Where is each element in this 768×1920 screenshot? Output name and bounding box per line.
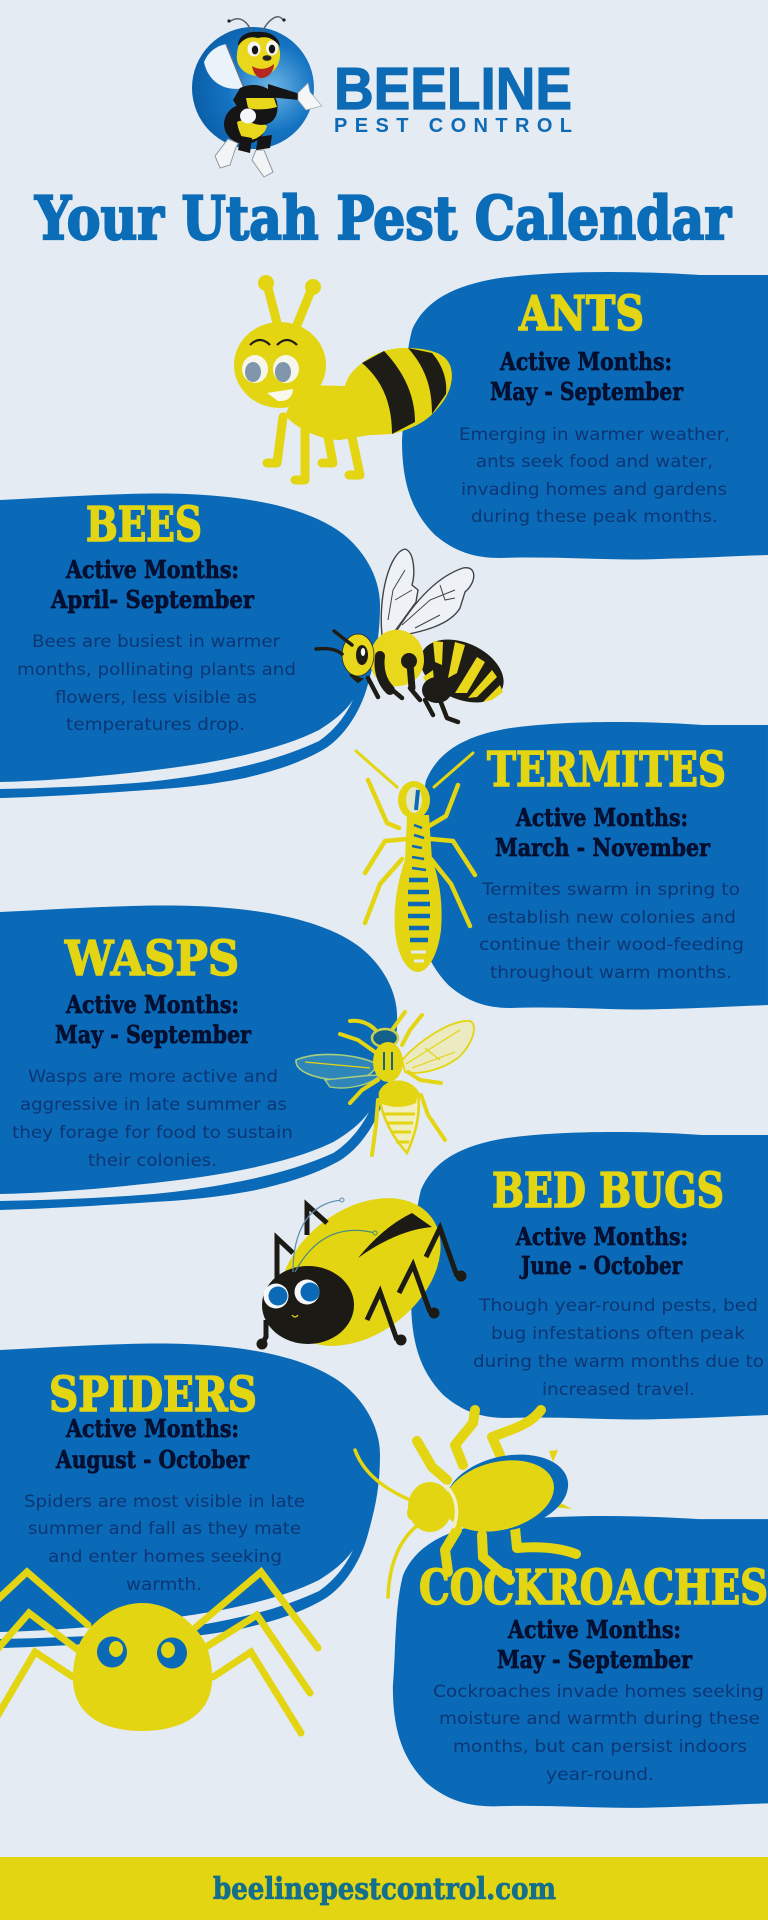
- shoes: [215, 139, 238, 168]
- panel: bed bugs: bug infestations often peak: [491, 1324, 745, 1343]
- panel: bed bugs: [411, 1132, 768, 1419]
- panel: spiders: and enter homes seeking: [48, 1547, 282, 1566]
- icon: cockroach: [355, 1410, 576, 1597]
- panel: bed bugs: Though year-round pests, bed: [478, 1296, 758, 1315]
- cockroaches text: Active Months:: [507, 1615, 681, 1644]
- panel: ants: during these peak months.: [471, 507, 718, 526]
- panel: wasps: Active Months:: [65, 990, 239, 1019]
- panel: spiders: warmth.: [126, 1575, 202, 1594]
- panel: spiders: summer and fall as they mate: [28, 1519, 301, 1538]
- panel: ants: ants seek food and water,: [476, 452, 713, 471]
- icon: bed bug: [251, 1168, 469, 1376]
- icon: wasp: [296, 1012, 474, 1155]
- icon: termite: [356, 751, 475, 972]
- panel: ants: ANTS: [518, 286, 644, 342]
- panel: spiders: August - October: [55, 1445, 249, 1474]
- panel: cockroaches: [393, 1516, 768, 1808]
- cockroaches text: moisture and warmth during these: [439, 1709, 760, 1728]
- panel: bed bugs: Active Months:: [515, 1222, 688, 1251]
- logo: [192, 17, 572, 177]
- panel: termites: Active Months:: [515, 803, 688, 832]
- panel: termites: Termites swarm in spring to: [481, 880, 740, 899]
- logo mascot: [192, 17, 322, 177]
- panel: spiders: [0, 1344, 380, 1648]
- panel: wasps: aggressive in late summer as: [20, 1095, 287, 1114]
- panel: wasps: their colonies.: [88, 1151, 217, 1170]
- cockroaches text: [419, 1560, 768, 1784]
- cockroaches text: May - September: [497, 1645, 692, 1674]
- panel: bed bugs: during the warm months due to: [473, 1352, 764, 1371]
- panel: ants: Emerging in warmer weather,: [459, 425, 730, 444]
- panel: termites: continue their wood-feeding: [479, 935, 744, 954]
- logo wordmark: BEELINE: [334, 56, 572, 122]
- panel: ants: [402, 272, 768, 559]
- footer band: beelinepestcontrol.com: [213, 1872, 556, 1907]
- panel: ants: Active Months:: [499, 347, 672, 376]
- panel: bees: Bees are busiest in warmer: [32, 632, 280, 651]
- panel: termites: establish new colonies and: [487, 908, 736, 927]
- footer band: [0, 1857, 768, 1920]
- panel: wasps: Wasps are more active and: [28, 1067, 278, 1086]
- panel: bees: Active Months:: [65, 555, 239, 584]
- panel: bed bugs: increased travel.: [542, 1380, 695, 1399]
- panel: termites: March - November: [495, 833, 710, 862]
- panel: termites: [417, 722, 768, 1009]
- panel: bees: BEES: [86, 497, 202, 553]
- logo wordmark: PEST CONTROL: [334, 115, 572, 137]
- panel: bees: [0, 494, 380, 798]
- panel: bees: flowers, less visible as: [55, 688, 257, 707]
- panel: wasps: May - September: [55, 1020, 251, 1049]
- panel: bees: temperatures drop.: [66, 715, 245, 734]
- panel: ants: invading homes and gardens: [461, 480, 727, 499]
- panel: wasps: they forage for food to sustain: [12, 1123, 293, 1142]
- panel: spiders: Spiders are most visible in late: [24, 1492, 305, 1511]
- panel: wasps: [0, 906, 397, 1210]
- icon: spider: [0, 1572, 318, 1733]
- cockroaches text: Cockroaches invade homes seeking: [433, 1682, 764, 1701]
- panel: spiders: SPIDERS: [49, 1367, 257, 1423]
- panel: bees: months, pollinating plants and: [17, 660, 296, 679]
- icon: bee: [316, 549, 514, 722]
- panel: spiders: Active Months:: [65, 1414, 239, 1443]
- panel: wasps: WASPS: [64, 931, 239, 987]
- panel: bed bugs: June - October: [519, 1251, 682, 1280]
- panel: termites: throughout warm months.: [490, 963, 732, 982]
- cockroaches text: months, but can persist indoors: [453, 1737, 747, 1756]
- icon: ant: [234, 275, 452, 480]
- panel: ants: May - September: [490, 377, 683, 406]
- cockroaches text: year-round.: [546, 1765, 654, 1784]
- panel: bees: April- September: [50, 585, 254, 614]
